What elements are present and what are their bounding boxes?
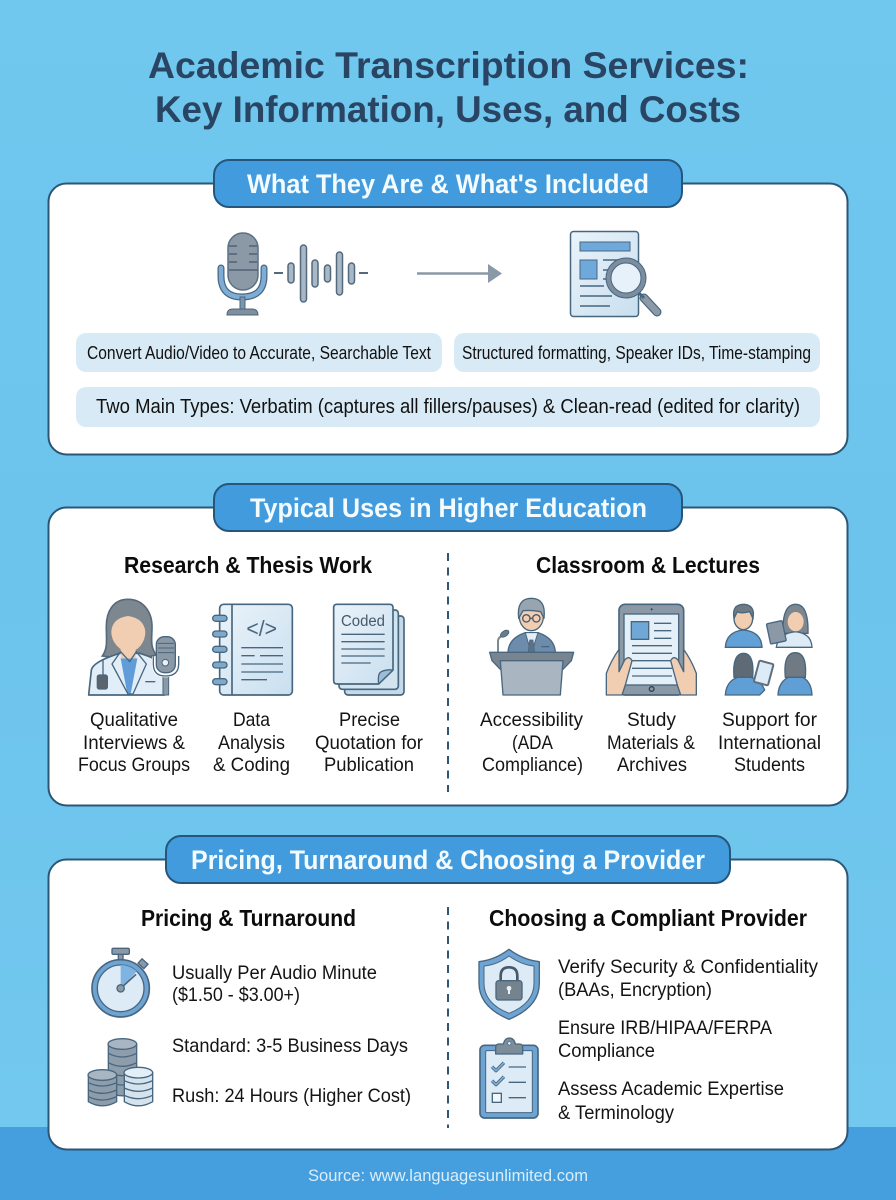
- label: precise quotation: [315, 709, 423, 776]
- text: per audio minute: Usually Per Audio Minute: [172, 962, 377, 984]
- icon: researcher: [89, 599, 179, 695]
- label: data analysis: Data: [233, 709, 270, 731]
- label: accessibility: (ADA: [512, 732, 553, 754]
- subheading: research: Research & Thesis Work: [124, 552, 372, 578]
- chip: convert audio: Convert Audio/Video to Accurate, Searchable Text: [87, 342, 431, 363]
- chip: convert audio: [76, 333, 442, 372]
- label: qualitative interviews: [78, 709, 190, 776]
- text: verify security: (BAAs, Encryption): [558, 979, 712, 1001]
- title: Key Information, Uses, and Costs: [155, 89, 741, 130]
- chip: formatting: [454, 333, 820, 372]
- label: precise quotation: Publication: [324, 754, 414, 776]
- icon: lecturer at podium: [490, 598, 574, 695]
- text: compliance: Ensure IRB/HIPAA/FERPA: [558, 1017, 772, 1039]
- label: precise quotation: Quotation for: [315, 732, 423, 754]
- chip: formatting: Structured formatting, Speaker IDs, Time-stamping: [462, 342, 811, 363]
- chip: two main types: Two Main Types: Verbatim (captures all fillers/pauses) & Clean-read (edited for clarity): [96, 395, 800, 418]
- title: Academic Transcription Services:: [148, 45, 749, 86]
- icon: coded pages: Coded: [341, 613, 385, 630]
- subheading: pricing: Pricing & Turnaround: [141, 905, 356, 931]
- icon: notebook: </>: [246, 616, 277, 641]
- text: compliance: Compliance: [558, 1040, 655, 1062]
- text: rush turnaround: Rush: 24 Hours (Higher Cost): [172, 1085, 411, 1107]
- label: study materials: Materials &: [607, 732, 695, 754]
- label: study materials: Archives: [617, 754, 687, 776]
- icon: security shield: [479, 949, 539, 1019]
- text: academic expertise: & Terminology: [558, 1102, 674, 1124]
- text: verify security: Verify Security & Confidentiality: [558, 956, 818, 978]
- heading: typical uses: Typical Uses in Higher Education: [250, 493, 647, 523]
- subheading: provider: Choosing a Compliant Provider: [489, 905, 807, 931]
- panel: what they are: [48, 160, 848, 454]
- icon: students group: [725, 604, 812, 695]
- panel: pricing and provider: [48, 836, 848, 1150]
- icon: coded pages: [334, 604, 404, 695]
- icon: checklist clipboard: [480, 1038, 538, 1118]
- label: qualitative interviews: Focus Groups: [78, 754, 190, 776]
- text: academic expertise: Assess Academic Expertise: [558, 1078, 784, 1100]
- text: standard turnaround: Standard: 3-5 Business Days: [172, 1035, 408, 1057]
- label: qualitative interviews: Interviews &: [83, 732, 185, 754]
- panel: typical uses: [48, 484, 848, 806]
- heading: pricing and provider: [166, 836, 730, 883]
- label: data analysis: & Coding: [213, 754, 290, 776]
- label: support for international: Students: [734, 754, 805, 776]
- label: data analysis: Analysis: [218, 732, 285, 754]
- text: verify security: [558, 956, 818, 1001]
- label: support for international: Support for: [722, 709, 817, 731]
- chip: two main types: [76, 387, 820, 427]
- icon: microphone: [221, 233, 264, 315]
- source footer: Source: www.languagesunlimited.com: [308, 1167, 588, 1185]
- label: study materials: [607, 709, 695, 776]
- text: academic expertise: [558, 1078, 784, 1124]
- title: [148, 45, 749, 130]
- label: accessibility: [480, 709, 583, 776]
- label: qualitative interviews: Qualitative: [90, 709, 178, 731]
- heading: pricing and provider: Pricing, Turnaround & Choosing a Provider: [191, 845, 705, 875]
- label: study materials: Study: [627, 709, 676, 731]
- label: precise quotation: Precise: [339, 709, 400, 731]
- label: support for international: [718, 709, 821, 776]
- icon: tablet in hands: [606, 604, 696, 695]
- icon: stopwatch: [92, 948, 149, 1017]
- icon: sound wave: [274, 245, 368, 302]
- icon: document with magnifier: [570, 232, 657, 316]
- icon: coin stacks: [88, 1039, 153, 1106]
- icon: notebook: [213, 604, 292, 695]
- text: compliance: [558, 1017, 772, 1062]
- text: per audio minute: [172, 962, 377, 1006]
- label: accessibility: Compliance): [482, 754, 583, 776]
- text: per audio minute: ($1.50 - $3.00+): [172, 984, 300, 1006]
- label: accessibility: Accessibility: [480, 709, 583, 731]
- heading: what they are: [214, 160, 682, 207]
- heading: what they are: What They Are & What's Included: [247, 169, 649, 199]
- heading: typical uses: [214, 484, 682, 531]
- arrow: [417, 264, 502, 283]
- label: data analysis: [213, 709, 290, 776]
- subheading: classroom: Classroom & Lectures: [536, 552, 760, 578]
- label: support for international: International: [718, 732, 821, 754]
